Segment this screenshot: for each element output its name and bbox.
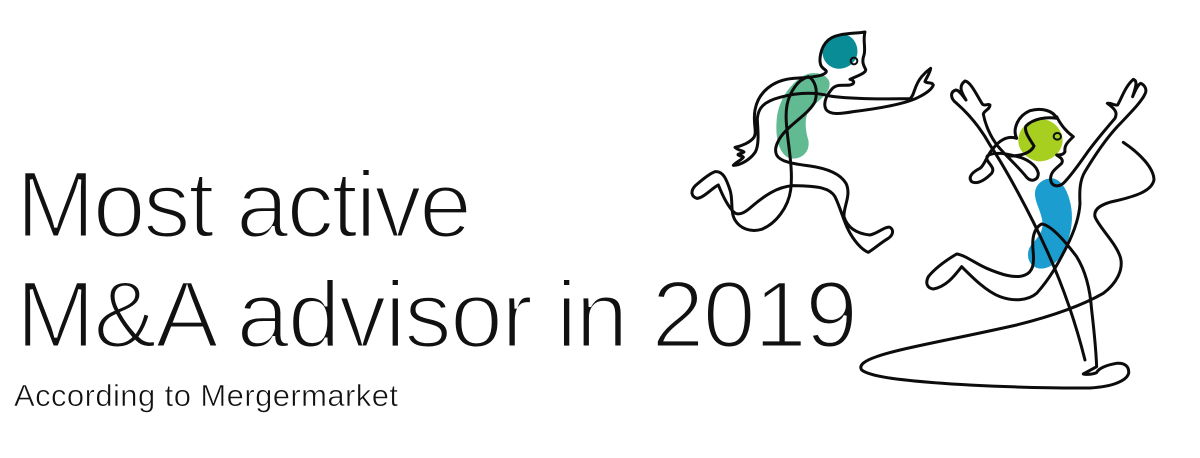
- woman body colour blob: [1028, 178, 1072, 269]
- illustration: running woman: [861, 79, 1154, 388]
- woman outline: arm, hair and ponytail: [952, 81, 1085, 360]
- subtitle: According to Mergermarket: [14, 378, 398, 413]
- title: Most active: [16, 152, 472, 258]
- woman head colour blob: [1018, 119, 1063, 161]
- man head colour blob: [823, 34, 857, 69]
- woman eye: [1054, 133, 1061, 140]
- title: M&A advisor in 2019: [16, 262, 858, 368]
- man body colour blob: [776, 73, 830, 159]
- title: [16, 152, 858, 368]
- illustration: running man: [692, 32, 933, 252]
- man lower outline: torso and legs: [692, 77, 893, 252]
- man upper outline: head, arms, face: [733, 32, 933, 165]
- woman outline: face, arm, body, legs and ground swoosh: [861, 79, 1154, 388]
- man eye: [851, 58, 857, 64]
